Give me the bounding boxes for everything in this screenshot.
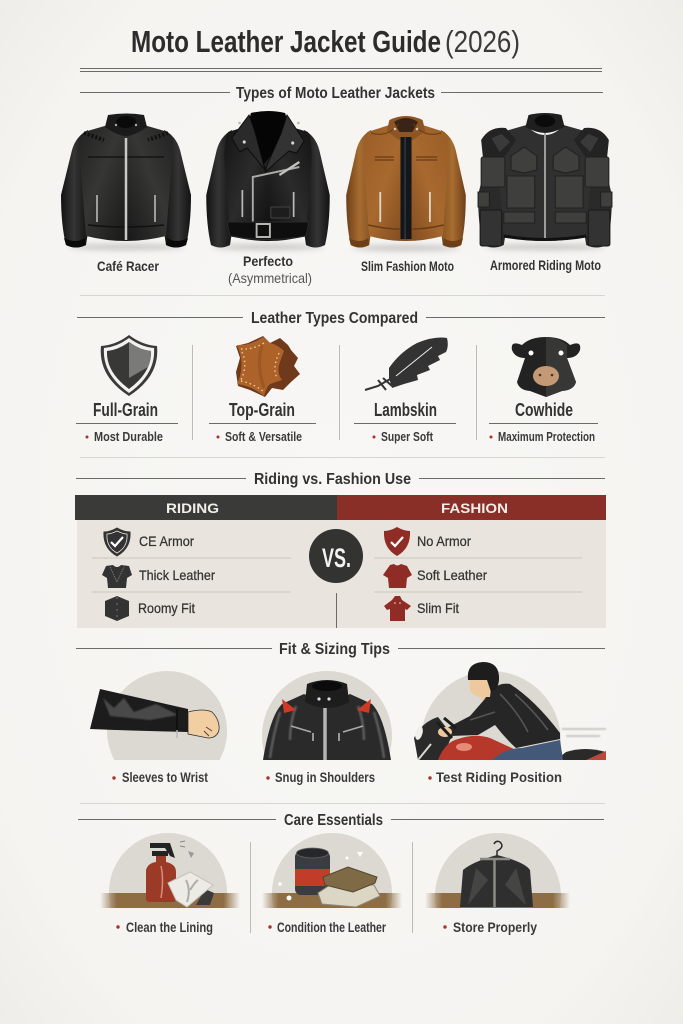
label: store properly: Store Properly — [453, 919, 537, 935]
jacket: armored riding moto — [478, 113, 612, 250]
label: test riding position: Test Riding Position — [436, 769, 562, 785]
label: perfecto: (Asymmetrical) — [228, 270, 312, 286]
row: no armor: No Armor — [417, 533, 471, 549]
label: condition the leather: Condition the Leather — [277, 919, 386, 935]
icon: ce armor shield — [104, 528, 130, 556]
illustration: snug in shoulders — [262, 671, 392, 760]
item: cowhide: Cowhide — [515, 400, 573, 420]
item: cowhide — [489, 400, 598, 444]
title: Moto Leather Jacket Guide — [131, 24, 441, 59]
icon: cowhide head — [512, 337, 580, 397]
illustration: test riding position — [414, 662, 606, 760]
item: lambskin: Super Soft — [381, 430, 434, 444]
header: fashion: FASHION — [441, 500, 508, 516]
panel: care essentials — [101, 833, 569, 935]
item: cowhide: Maximum Protection — [498, 430, 595, 444]
jacket: cafe racer — [61, 114, 191, 250]
item: top-grain: Top-Grain — [229, 400, 295, 420]
row: roomy fit: Roomy Fit — [138, 600, 195, 616]
header: riding — [75, 495, 337, 520]
icon: no armor shield — [384, 527, 410, 556]
icon: full-grain shield — [101, 335, 157, 396]
label: slim fashion moto: Slim Fashion Moto — [361, 258, 454, 274]
panel: fit tips — [90, 662, 606, 785]
badge: vs: VS. — [322, 543, 351, 573]
illustration: condition the leather — [263, 833, 401, 908]
badge: vs — [309, 529, 363, 583]
row: thick leather: Thick Leather — [139, 567, 215, 583]
jacket: perfecto — [206, 111, 330, 250]
panel: riding vs fashion table — [75, 495, 606, 628]
illustration: sleeves to wrist — [90, 671, 227, 760]
item: lambskin: Lambskin — [374, 400, 437, 420]
item: top-grain: Soft & Versatile — [225, 430, 302, 444]
item: full-grain: Full-Grain — [93, 400, 158, 420]
icon: roomy fit — [105, 596, 129, 621]
label: perfecto — [228, 253, 312, 286]
heading: care essentials: Care Essentials — [284, 812, 383, 829]
item: full-grain — [76, 400, 178, 444]
row: slim fit: Slim Fit — [417, 600, 459, 616]
icon: thick leather — [102, 565, 132, 588]
item: full-grain: Most Durable — [94, 430, 163, 444]
illustration: clean the lining — [101, 833, 239, 908]
icon: lambskin feather — [365, 338, 448, 390]
illustration: store properly — [426, 833, 569, 908]
icon: top-grain leather hide — [236, 336, 300, 397]
row: ce armor: CE Armor — [139, 533, 194, 549]
label: cafe racer: Café Racer — [97, 258, 159, 274]
label: perfecto: Perfecto — [243, 253, 293, 269]
row: soft leather: Soft Leather — [417, 567, 487, 583]
label: snug in shoulders: Snug in Shoulders — [275, 769, 375, 785]
panel: jacket types — [61, 111, 612, 251]
label: sleeves to wrist: Sleeves to Wrist — [122, 769, 208, 785]
item: lambskin — [354, 400, 456, 444]
heading: leather types: Leather Types Compared — [251, 310, 418, 327]
header: fashion — [337, 495, 606, 520]
header: riding: RIDING — [166, 500, 219, 516]
label: clean the lining: Clean the Lining — [126, 919, 213, 935]
heading: types of jackets: Types of Moto Leather Jackets — [236, 85, 435, 102]
heading: riding vs fashion: Riding vs. Fashion Use — [254, 471, 411, 488]
jacket: slim fashion moto — [346, 116, 466, 251]
title: (2026) — [445, 24, 520, 59]
label: armored riding moto: Armored Riding Moto — [490, 257, 601, 273]
heading: fit and sizing: Fit & Sizing Tips — [279, 641, 390, 658]
icon: soft leather — [383, 564, 412, 588]
icon: slim fit — [384, 596, 411, 621]
item: top-grain — [209, 400, 316, 444]
panel: leather types — [76, 335, 598, 444]
